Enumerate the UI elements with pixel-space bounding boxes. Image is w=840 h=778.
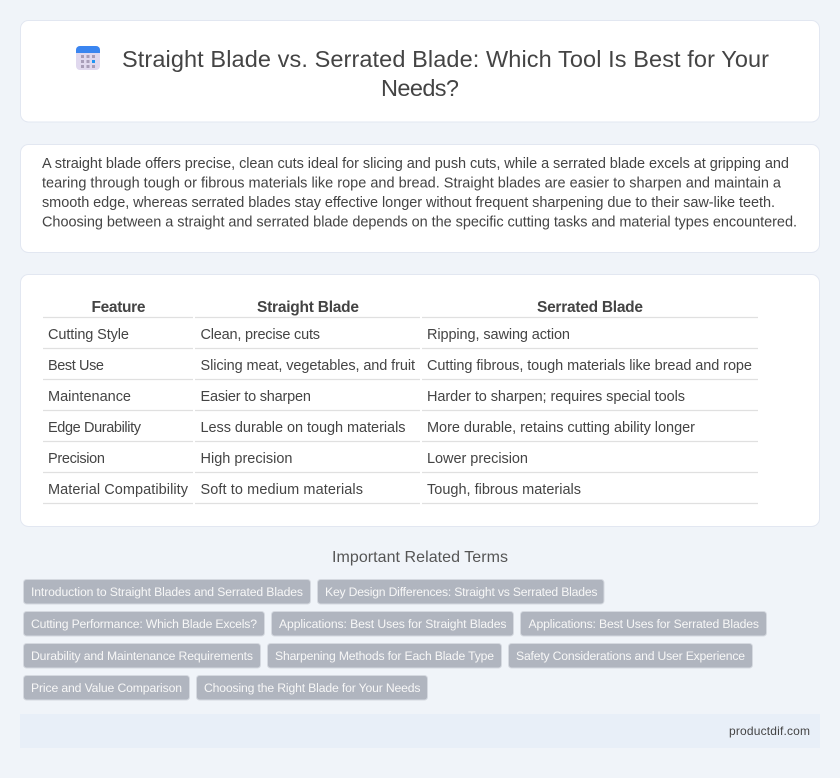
tag: Introduction to Straight Blades and Serrated Blades xyxy=(31,585,303,599)
tag xyxy=(508,644,752,668)
tag xyxy=(520,612,766,636)
tag xyxy=(24,676,190,700)
tag: Applications: Best Uses for Serrated Blades xyxy=(528,617,759,631)
tag: Applications: Best Uses for Straight Blades xyxy=(279,617,506,631)
footer xyxy=(20,714,820,748)
tag: Key Design Differences: Straight vs Serrated Blades xyxy=(325,585,598,599)
row: maintenance: Maintenance xyxy=(48,389,131,405)
panel: comparison table xyxy=(20,274,820,526)
icon: calendar xyxy=(76,46,100,70)
table header: Feature xyxy=(92,299,146,316)
tag xyxy=(24,612,264,636)
footer: productdif.com xyxy=(729,724,810,738)
row: maintenance: Harder to sharpen; requires special tools xyxy=(427,389,685,405)
paragraph: tearing through tough or fibrous materials like rope and bread. Straight blades are easier to sharpen and maintain a xyxy=(42,176,782,192)
row: precision: High precision xyxy=(200,451,292,467)
row: precision: Precision xyxy=(48,451,105,467)
tag: Price and Value Comparison xyxy=(31,681,182,695)
tag xyxy=(268,644,502,668)
tag group: related terms xyxy=(24,580,766,700)
tag xyxy=(24,644,260,668)
row: edge durability: Less durable on tough materials xyxy=(200,420,406,436)
row: cutting style: Cutting Style xyxy=(48,327,129,343)
title xyxy=(122,46,769,101)
panel: introduction text xyxy=(20,144,820,252)
table header xyxy=(92,299,643,316)
row: material compatibility: Tough, fibrous materials xyxy=(427,482,581,498)
row: best use: Best Use xyxy=(48,358,104,374)
title: Straight Blade vs. Serrated Blade: Which Tool Is Best for Your xyxy=(122,46,769,72)
paragraph: A straight blade offers precise, clean cuts ideal for slicing and push cuts, while a serrated blade excels at gripping and xyxy=(42,156,789,172)
paragraph: Choosing between a straight and serrated blade depends on the specific cutting tasks and material types encountered. xyxy=(42,214,797,230)
title: Needs? xyxy=(381,75,459,101)
paragraph xyxy=(42,156,797,230)
row: cutting style: Ripping, sawing action xyxy=(427,327,570,343)
row: cutting style: Clean, precise cuts xyxy=(200,327,320,343)
tag: Cutting Performance: Which Blade Excels? xyxy=(31,617,257,631)
tag: Choosing the Right Blade for Your Needs xyxy=(204,681,420,695)
tag: Safety Considerations and User Experience xyxy=(516,649,745,663)
tag xyxy=(24,580,310,604)
row: maintenance xyxy=(48,389,685,405)
row: best use xyxy=(48,358,752,374)
tag xyxy=(196,676,428,700)
row: material compatibility: Material Compatibility xyxy=(48,482,189,498)
panel: header xyxy=(20,20,820,122)
row: precision: Lower precision xyxy=(427,451,528,467)
row: best use: Cutting fibrous, tough materials like bread and rope xyxy=(427,358,752,374)
tag xyxy=(318,580,604,604)
table header: Straight Blade xyxy=(257,299,359,316)
tag xyxy=(272,612,514,636)
table header: Serrated Blade xyxy=(537,299,643,316)
row: edge durability xyxy=(48,420,695,436)
row: edge durability: Edge Durability xyxy=(48,420,142,436)
row: best use: Slicing meat, vegetables, and fruit xyxy=(200,358,415,374)
heading: related terms: Important Related Terms xyxy=(332,549,508,566)
tag: Durability and Maintenance Requirements xyxy=(31,649,253,663)
row: material compatibility xyxy=(48,482,581,498)
row: precision xyxy=(48,451,528,467)
row: material compatibility: Soft to medium materials xyxy=(200,482,363,498)
paragraph: smooth edge, whereas serrated blades stay effective longer without frequent sharpening due to their saw-like teeth. xyxy=(42,195,775,211)
tag: Sharpening Methods for Each Blade Type xyxy=(275,649,494,663)
row: edge durability: More durable, retains cutting ability longer xyxy=(427,420,695,436)
row: cutting style xyxy=(48,327,570,343)
row: maintenance: Easier to sharpen xyxy=(200,389,311,405)
